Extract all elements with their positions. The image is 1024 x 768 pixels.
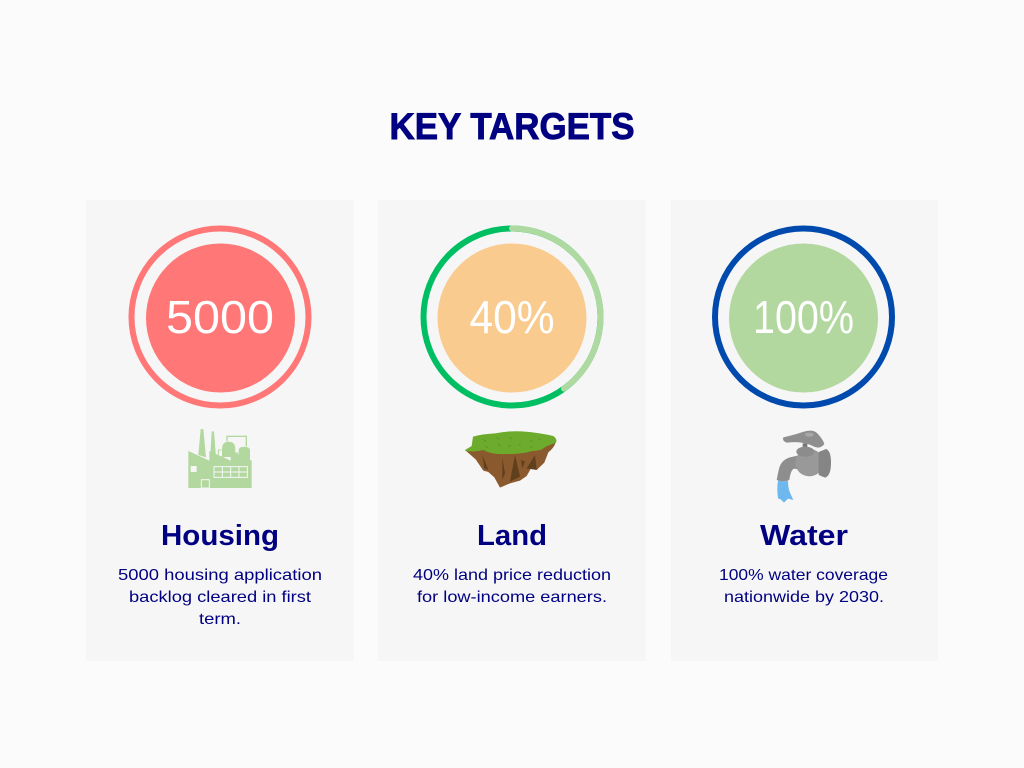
text: housing description: backlog cleared in first bbox=[129, 589, 312, 606]
panel: water bbox=[671, 200, 938, 661]
text: housing description: 5000 housing application bbox=[118, 567, 322, 584]
icon: factory bbox=[188, 429, 252, 488]
text: water description: 100% water coverage bbox=[719, 567, 888, 584]
text: land description bbox=[413, 567, 611, 606]
panel: housing bbox=[86, 200, 354, 661]
title: KEY TARGETS bbox=[390, 106, 634, 147]
heading: housing: Housing bbox=[161, 520, 279, 552]
stat circle: 5000 bbox=[146, 244, 295, 392]
heading: land: Land bbox=[477, 520, 547, 552]
stat circle: 100% bbox=[729, 244, 878, 392]
panel: land bbox=[378, 200, 646, 661]
progress ring: housing bbox=[132, 228, 308, 406]
stat circle: 5000: 5000 bbox=[166, 291, 274, 343]
heading: water: Water bbox=[760, 520, 848, 552]
stat circle: 100%: 100% bbox=[753, 291, 854, 343]
icon: floating island bbox=[465, 431, 556, 488]
stat circle: 40% bbox=[438, 244, 586, 392]
text: housing description: term. bbox=[199, 611, 241, 628]
text: water description: nationwide by 2030. bbox=[724, 589, 884, 606]
progress ring: land bbox=[424, 228, 600, 406]
text: land description: 40% land price reduction bbox=[413, 567, 611, 584]
progress ring: water bbox=[715, 228, 892, 406]
text: water description bbox=[719, 567, 888, 606]
text: land description: for low-income earners. bbox=[417, 589, 607, 606]
text: housing description bbox=[118, 567, 322, 628]
stat circle: 40%: 40% bbox=[470, 291, 554, 343]
icon: water tap bbox=[777, 431, 831, 503]
